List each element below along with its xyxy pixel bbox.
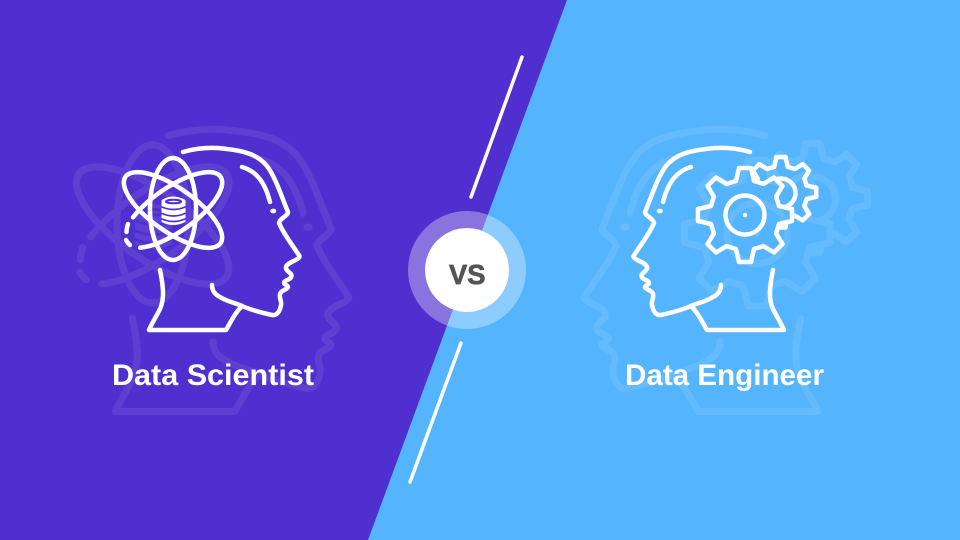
panel: data scientist background	[0, 0, 567, 540]
heading: data engineer: Data Engineer	[625, 359, 824, 392]
ghost icon: data scientist head	[59, 129, 349, 411]
icon: data engineer head with gears	[633, 148, 816, 330]
vs badge: VS	[449, 259, 486, 290]
divider line: top	[471, 57, 522, 197]
icon: data scientist head with atom	[113, 148, 300, 330]
heading: data scientist: Data Scientist	[112, 359, 314, 392]
ghost icon: data engineer head	[584, 129, 868, 411]
divider line: bottom	[410, 343, 461, 482]
vs badge	[416, 220, 518, 320]
